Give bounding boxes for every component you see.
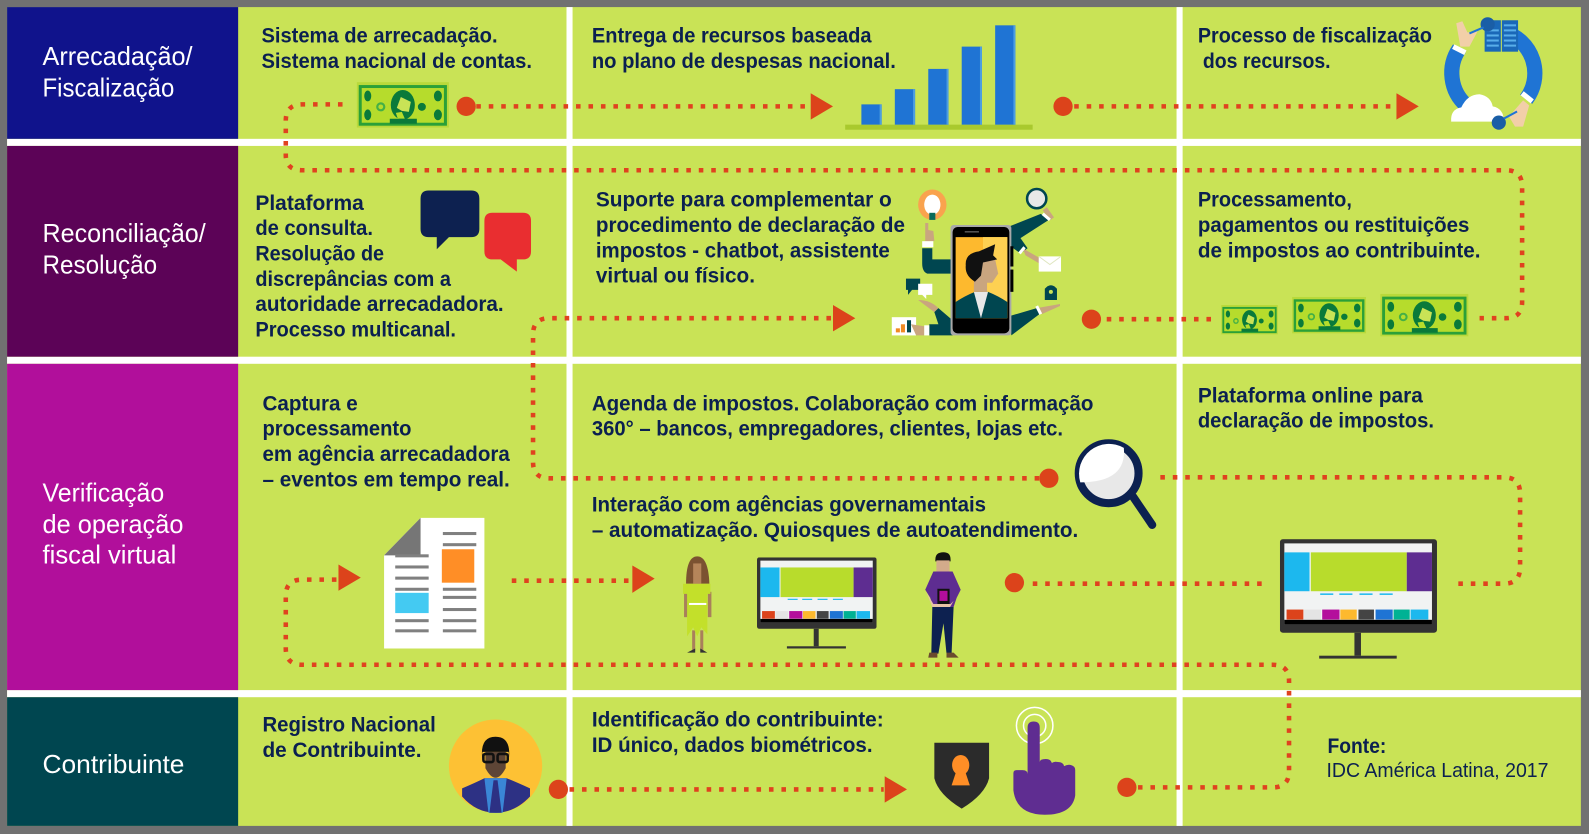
text: Plataforma online <box>1198 383 1434 433</box>
text: Processo de fiscalização: Processo de fiscalização <box>1198 24 1432 48</box>
text: source: IDC América Latina, 2017 <box>1327 760 1548 782</box>
icon: shield with keyhole <box>934 743 989 809</box>
text: Registro Nacional: Registro Nacional <box>262 713 436 737</box>
icon: man with tablet <box>925 552 961 658</box>
text: Registro Nacional: de Contribuinte. <box>262 738 422 762</box>
icon: chat bubbles <box>421 191 531 272</box>
text: Entrega de recursos: no plano de despesas nacional. <box>592 49 896 73</box>
text: Processamento: pagamentos ou restituições <box>1198 213 1469 237</box>
text: Captura e processamento: processamento <box>262 417 411 441</box>
text: Processamento: de impostos ao contribuinte. <box>1198 238 1481 262</box>
text: Plataforma de consulta: Resolução de <box>255 241 384 265</box>
text: Plataforma de consulta: Plataforma <box>255 191 364 215</box>
icon: touch hand <box>1013 707 1075 815</box>
icon: taxpayer avatar <box>449 719 542 813</box>
text: Processamento <box>1198 188 1481 262</box>
panel: row label Reconciliação/Resolução <box>7 146 238 357</box>
icon: three banknotes <box>1221 294 1468 336</box>
text: Suporte para complementar: impostos - chatbot, assistente <box>596 238 890 262</box>
text: Registro Nacional <box>262 713 436 762</box>
text: Plataforma online: declaração de impostos. <box>1198 409 1434 433</box>
text: source: Fonte: <box>1328 734 1386 758</box>
panel: row label Arrecadação/Fiscalização: Arrecadação/ <box>43 41 193 71</box>
text: Suporte para complementar: Suporte para complementar o <box>596 188 892 212</box>
text: Plataforma de consulta <box>255 191 504 341</box>
text: Interação com agências: – automatização. Quiosques de autoatendimento. <box>592 518 1078 542</box>
panel: row label Verificação de operação fiscal virtual <box>7 364 238 690</box>
text: Plataforma de consulta: de consulta. <box>255 216 373 240</box>
text: Plataforma de consulta: autoridade arrecadadora. <box>255 292 504 316</box>
text: Identificação do contribuinte <box>592 708 884 757</box>
icon: virtual assistant on phone <box>892 189 1061 335</box>
text: Interação com agências: Interação com agências governamentais <box>592 493 986 517</box>
icon: monitor <box>757 557 877 649</box>
text: Identificação do contribuinte: ID único, dados biométricos. <box>592 733 873 757</box>
text: Suporte para complementar <box>596 188 905 288</box>
panel: row label Contribuinte: Contribuinte <box>43 749 184 779</box>
text: Sistema de arrecadação: Sistema de arrecadação. <box>261 24 498 48</box>
text: Plataforma de consulta: discrepâncias com a <box>255 267 451 291</box>
text: Processo de fiscalização <box>1198 24 1432 73</box>
text: source <box>1327 734 1548 782</box>
icon: large monitor <box>1280 539 1437 659</box>
text: Interação com agências <box>592 493 1078 542</box>
icon: woman <box>683 556 711 653</box>
panel: row label Verificação de operação fiscal virtual: fiscal virtual <box>43 539 176 569</box>
text: Captura e processamento <box>262 391 510 491</box>
text: Identificação do contribuinte: Identificação do contribuinte: <box>592 708 884 732</box>
text: Processo de fiscalização: dos recursos. <box>1203 49 1331 73</box>
flow: start dots <box>457 97 1137 799</box>
text: Captura e processamento: – eventos em tempo real. <box>262 467 510 491</box>
icon: document <box>384 518 484 649</box>
text: Suporte para complementar: virtual ou físico. <box>596 264 755 288</box>
flow: dotted connector lines <box>286 104 1522 789</box>
text: Plataforma de consulta: Processo multicanal. <box>255 317 456 341</box>
text: Agenda de impostos: Agenda de impostos. Colaboração com informação <box>592 391 1093 415</box>
panel: row label Arrecadação/Fiscalização <box>7 7 238 139</box>
text: Captura e processamento: Captura e <box>262 391 358 415</box>
icon: bar chart <box>845 25 1033 130</box>
text: Plataforma online: Plataforma online para <box>1198 383 1423 407</box>
text: Entrega de recursos: Entrega de recursos baseada <box>592 24 872 48</box>
panel: row label Verificação de operação fiscal virtual: Verificação <box>43 478 164 508</box>
text: Entrega de recursos <box>592 24 896 73</box>
text: Sistema de arrecadação: Sistema nacional de contas. <box>261 49 532 73</box>
icon: magnifying glass <box>1079 443 1152 525</box>
text: Suporte para complementar: procedimento de declaração de <box>596 213 905 237</box>
text: Sistema de arrecadação <box>261 24 532 73</box>
panel: row label Reconciliação/Resolução: Resolução <box>43 250 157 280</box>
panel: row label Reconciliação/Resolução: Reconciliação/ <box>43 218 206 248</box>
icon: banknote <box>357 82 449 128</box>
text: Agenda de impostos: 360° – bancos, empregadores, clientes, lojas etc. <box>592 417 1063 441</box>
panel: row label Verificação de operação fiscal virtual: de operação <box>43 509 183 539</box>
text: Agenda de impostos <box>592 391 1093 441</box>
icon: cloud and server cycle <box>1451 17 1535 130</box>
panel: row label Contribuinte <box>7 697 238 826</box>
text: Processamento: Processamento, <box>1198 188 1352 212</box>
panel: row label Arrecadação/Fiscalização: Fiscalização <box>43 72 174 102</box>
flow: arrowheads <box>338 93 1419 803</box>
text: Captura e processamento: em agência arrecadadora <box>262 442 510 466</box>
